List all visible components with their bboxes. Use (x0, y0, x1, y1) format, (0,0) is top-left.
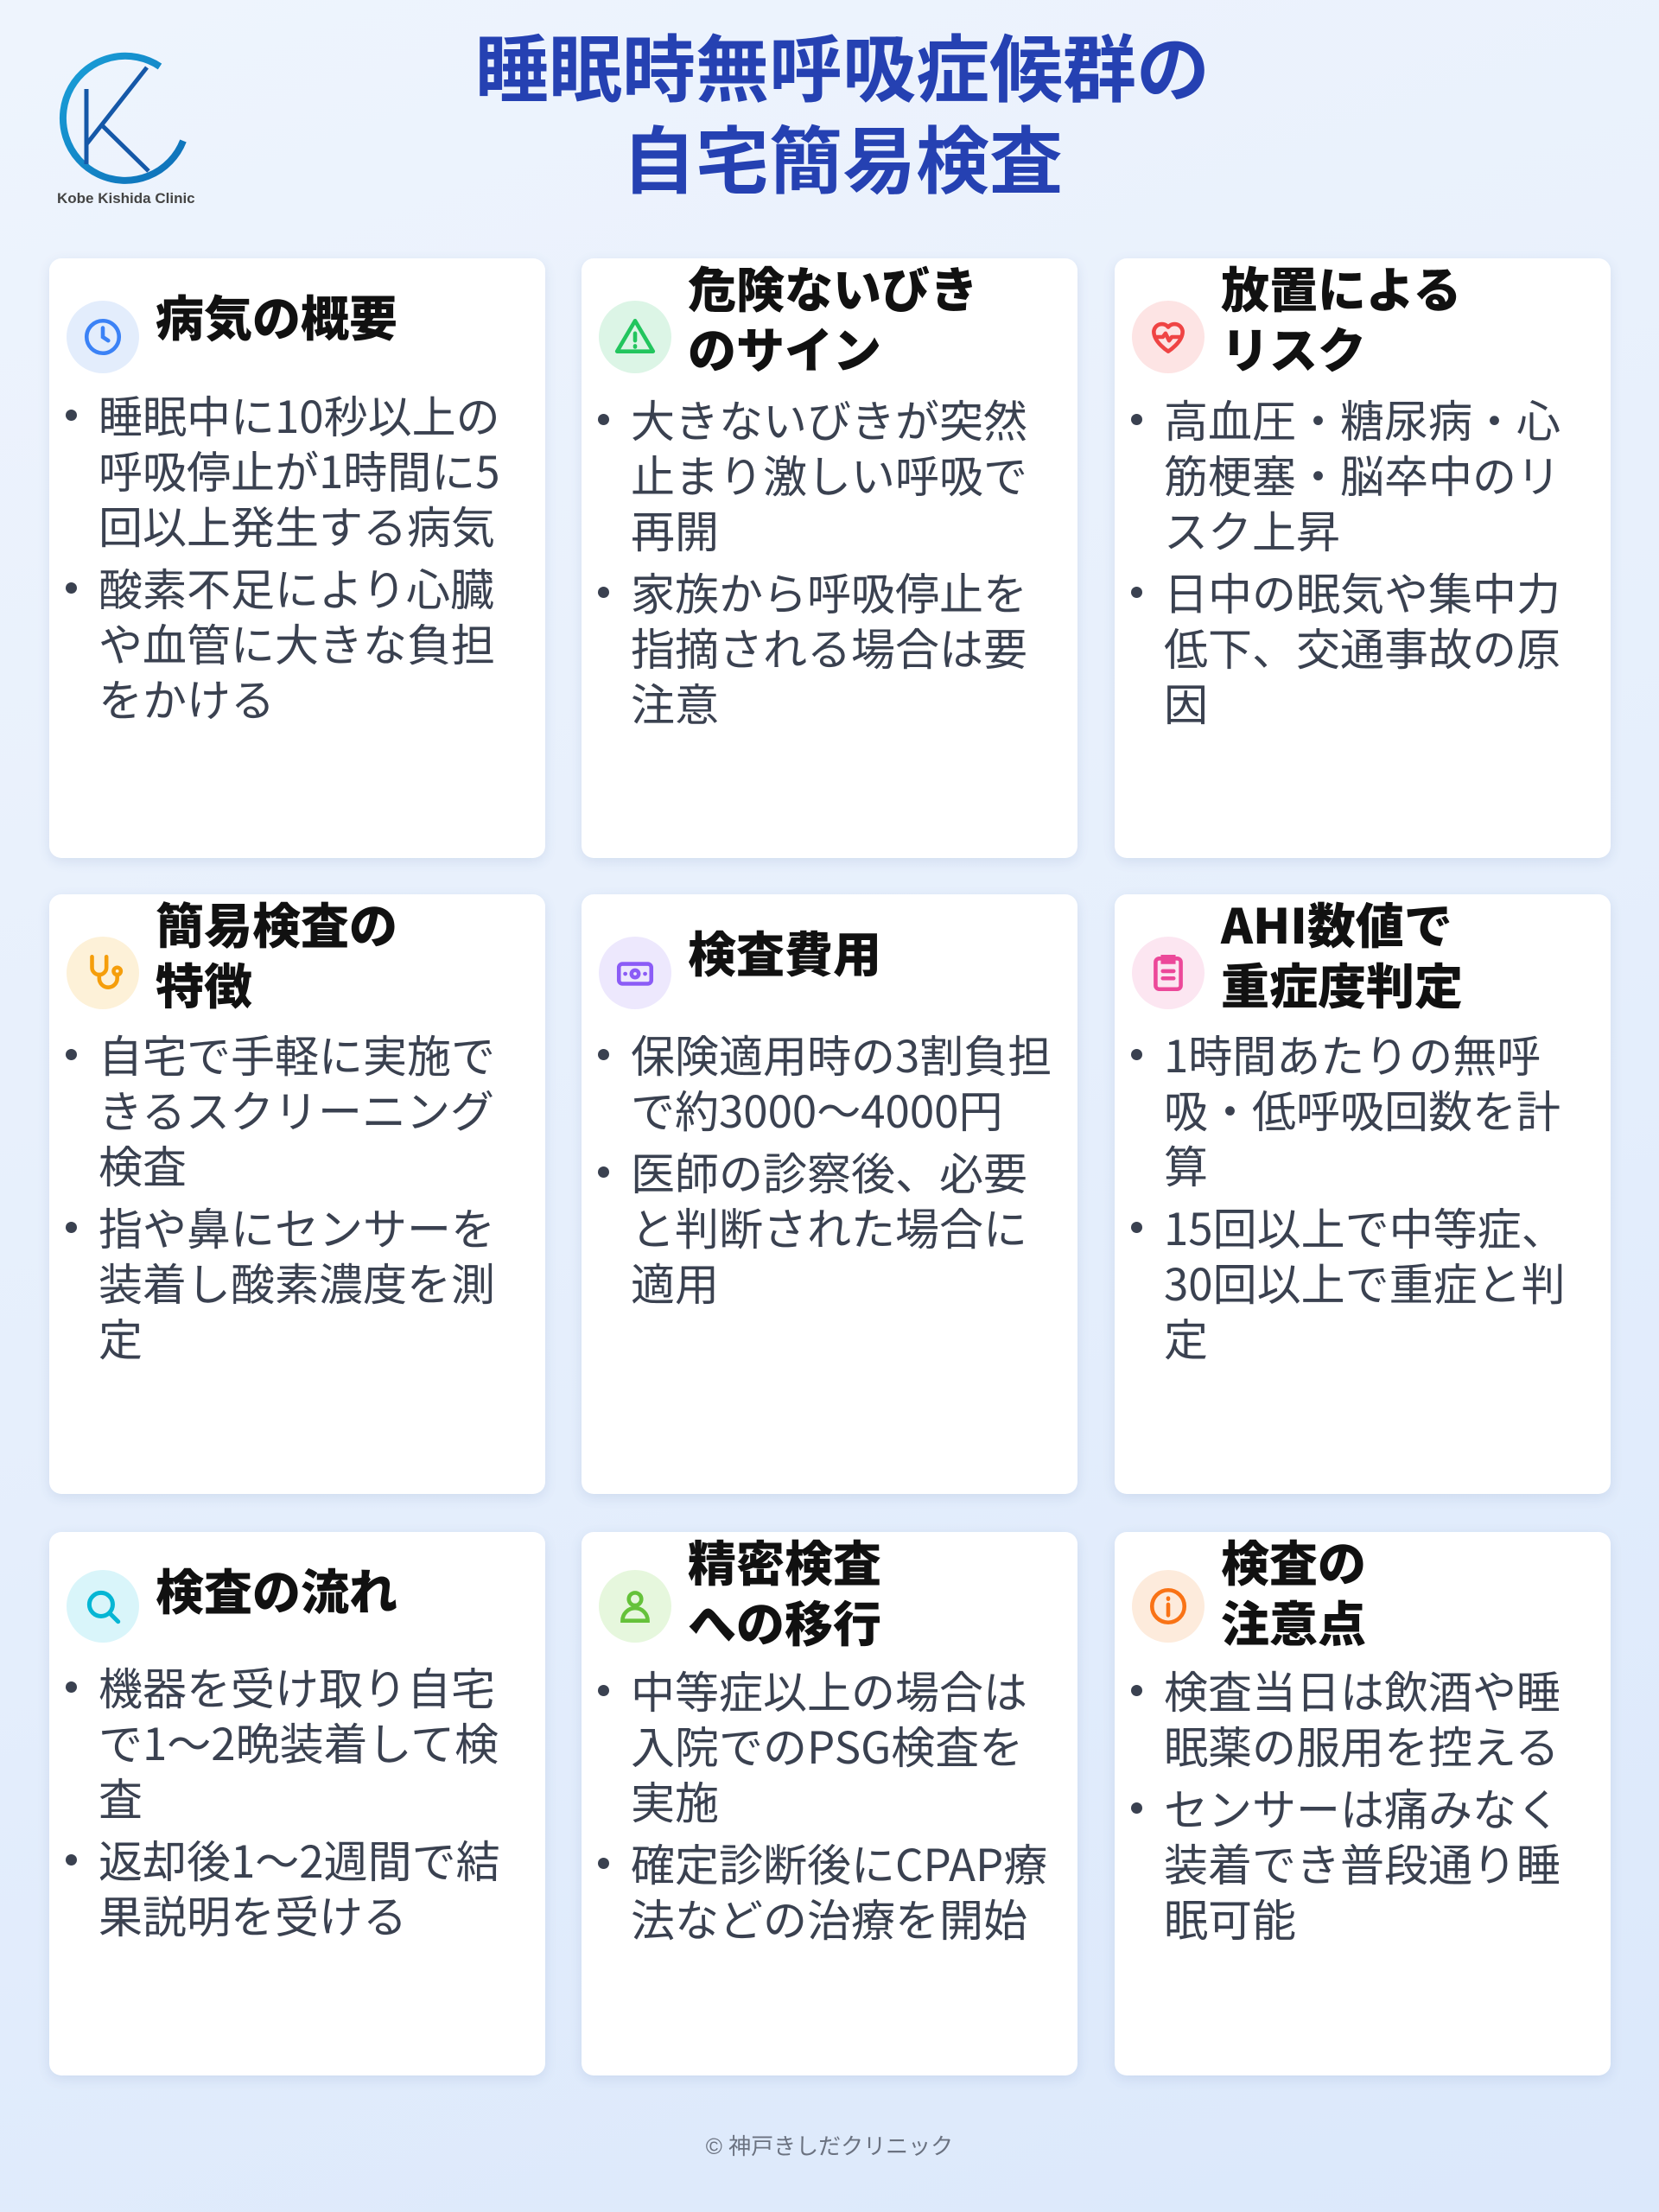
heading: 簡易検査の (156, 888, 397, 958)
panel: 放置によるリスク (1115, 258, 1611, 858)
text block: 法などの治療を開始 (631, 1885, 1027, 1949)
heading (1220, 888, 1463, 1019)
text block: 15回以上で中等症、 (1164, 1194, 1566, 1258)
icon: heart (1132, 301, 1205, 373)
icon: clipboard (1132, 937, 1205, 1009)
text block: 保険適用時の3割負担 (631, 1021, 1052, 1085)
heading (1221, 252, 1461, 383)
heading: 精密検査 (688, 1526, 881, 1596)
text block: 再開 (631, 497, 719, 561)
text block: 実施 (631, 1768, 719, 1832)
text block: をかける (99, 665, 275, 729)
text block: 検査 (99, 1132, 187, 1196)
heading: 注意点 (1221, 1586, 1366, 1656)
heading: 重症度判定 (1221, 949, 1463, 1019)
heading: 検査の (1221, 1526, 1366, 1596)
text block (1131, 1021, 1566, 1369)
panel: AHI数値で重症度判定 (1115, 894, 1611, 1494)
heading: 放置による (1221, 252, 1461, 322)
panel: 検査費用 (582, 894, 1077, 1494)
text block: 算 (1164, 1132, 1208, 1196)
text block: 吸・低呼吸回数を計 (1164, 1077, 1560, 1141)
text block: 入院でのPSG検査を (631, 1713, 1023, 1777)
panel: 病気の概要 (49, 258, 545, 858)
text block (1131, 1657, 1560, 1949)
text block: 返却後1〜2週間で結 (99, 1827, 500, 1891)
text block: 適用 (631, 1249, 719, 1313)
text block: 指や鼻にセンサーを (99, 1194, 495, 1258)
text block: 回以上発生する病気 (99, 493, 495, 556)
text block (66, 382, 500, 729)
text block: 大きないびきが突然 (631, 386, 1027, 450)
logo: Kobe Kishida Clinic (57, 190, 195, 207)
text block: 確定診断後にCPAP療 (631, 1830, 1047, 1894)
heading: 病気の概要 (156, 281, 397, 351)
title: 自宅簡易検査 (622, 103, 1063, 209)
icon: warning (599, 301, 671, 373)
text block: センサーは痛みなく (1164, 1775, 1560, 1839)
text block: 酸素不足により心臓 (99, 555, 494, 619)
text block: 家族から呼吸停止を (631, 559, 1027, 623)
text block (598, 1021, 1052, 1313)
text block: 医師の診察後、必要 (631, 1139, 1027, 1203)
text block: 因 (1164, 670, 1208, 734)
text block: スク上昇 (1164, 497, 1340, 561)
text block: や血管に大きな負担 (99, 610, 495, 674)
icon: clock (67, 301, 139, 373)
text block: 筋梗塞・脳卒中のリ (1164, 442, 1560, 505)
heading (1221, 1526, 1366, 1656)
text block (598, 1657, 1047, 1949)
text block: で約3000〜4000円 (631, 1077, 1002, 1141)
title: 睡眠時無呼吸症候群の (475, 11, 1210, 118)
heading: 危険ないびき (688, 252, 978, 322)
text block: 30回以上で重症と判 (1164, 1249, 1566, 1313)
text block: 検査当日は飲酒や睡 (1164, 1657, 1560, 1721)
text block: 査 (99, 1764, 143, 1828)
text block: 眠薬の服用を控える (1164, 1713, 1559, 1777)
text block: 定 (99, 1305, 143, 1369)
text block: 中等症以上の場合は (631, 1657, 1027, 1721)
heading (156, 888, 397, 1019)
text block: 呼吸停止が1時間に5 (99, 437, 500, 501)
text block: 高血圧・糖尿病・心 (1164, 386, 1560, 450)
logo (57, 52, 195, 207)
text block (598, 386, 1027, 734)
heading: AHI数値で (1221, 888, 1452, 958)
text block: 定 (1164, 1305, 1208, 1369)
panel: 検査の注意点 (1115, 1532, 1611, 2075)
panel: 簡易検査の特徴 (49, 894, 545, 1494)
text block: 果説明を受ける (99, 1882, 407, 1946)
heading: 検査の流れ (156, 1554, 397, 1624)
text block: 装着でき普段通り睡 (1164, 1830, 1560, 1894)
text block: 装着し酸素濃度を測 (99, 1249, 495, 1313)
heading (688, 1526, 881, 1656)
heading: のサイン (688, 313, 881, 383)
icon: info (1132, 1570, 1205, 1643)
icon: money (599, 937, 671, 1009)
heading: リスク (1221, 313, 1366, 383)
title (475, 11, 1210, 209)
icon: stethoscope (67, 937, 139, 1009)
text block: 日中の眠気や集中力 (1164, 559, 1560, 623)
panel: 検査の流れ (49, 1532, 545, 2075)
text block: で1〜2晩装着して検 (99, 1709, 499, 1773)
heading (688, 252, 978, 383)
text block (66, 1021, 495, 1369)
text block: 自宅で手軽に実施で (99, 1021, 495, 1085)
text block: 眠可能 (1164, 1885, 1296, 1949)
text block: 機器を受け取り自宅 (99, 1654, 495, 1718)
footer: © 神戸きしだクリニック (706, 2133, 953, 2159)
text block (66, 1654, 500, 1946)
icon: user (599, 1570, 671, 1643)
text block: と判断された場合に (631, 1194, 1027, 1258)
panel: 精密検査への移行 (582, 1532, 1077, 2075)
text block: 注意 (631, 670, 719, 734)
icon: search (67, 1570, 139, 1643)
text block: きるスクリーニング (99, 1077, 494, 1141)
panel: 危険ないびきのサイン (582, 258, 1077, 858)
text block: 1時間あたりの無呼 (1164, 1021, 1541, 1085)
heading: への移行 (688, 1586, 881, 1656)
text block: 睡眠中に10秒以上の (99, 382, 500, 446)
heading: 特徴 (156, 949, 252, 1019)
heading: 検査費用 (688, 917, 881, 987)
text block: 指摘される場合は要 (631, 614, 1027, 678)
text block (1131, 386, 1560, 734)
text block: 低下、交通事故の原 (1164, 614, 1560, 678)
text block: 止まり激しい呼吸で (631, 442, 1027, 505)
